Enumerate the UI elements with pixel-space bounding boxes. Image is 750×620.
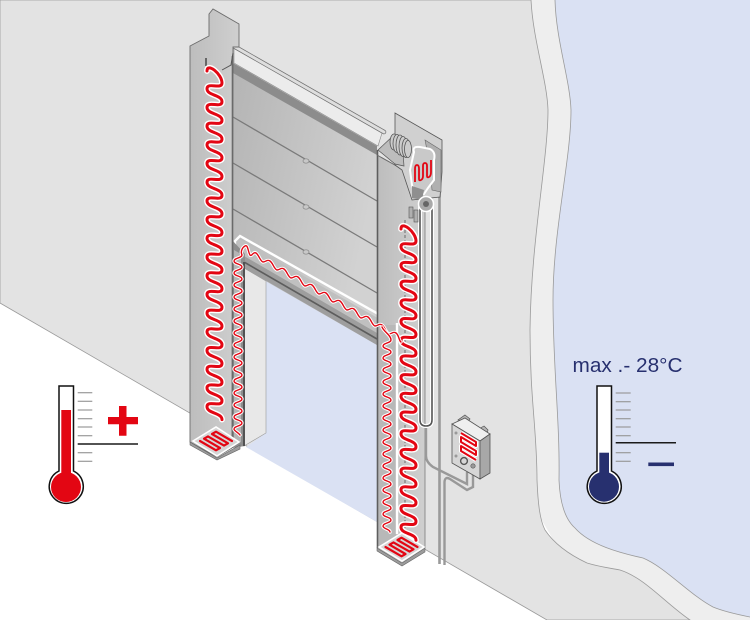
scale ticks	[616, 393, 631, 461]
cold thermometer	[587, 386, 676, 503]
door opening	[246, 280, 377, 522]
motor with heater	[410, 147, 434, 194]
left jamb	[190, 9, 266, 457]
guide tubes and cables	[420, 192, 473, 565]
drive mechanism	[378, 113, 442, 222]
panel ribs	[233, 117, 377, 293]
right floor pad	[377, 533, 425, 566]
control box	[452, 415, 490, 479]
weights	[409, 207, 413, 218]
spring coil	[390, 134, 412, 158]
right jamb	[377, 150, 425, 563]
scale ticks	[78, 393, 92, 461]
heating cable: right jamb	[401, 226, 416, 540]
minus sign	[648, 462, 674, 466]
left floor pad	[190, 427, 240, 460]
box heating coil	[461, 433, 476, 460]
temperature label: max .- 28°C	[572, 355, 682, 377]
white gap above door	[234, 48, 382, 146]
heating cable: left jamb	[207, 68, 222, 420]
top shaft	[230, 44, 384, 132]
motor heating coil	[415, 160, 431, 182]
warm thermometer	[49, 386, 138, 503]
curved band between wall and outside	[520, 0, 750, 620]
cold outside area	[550, 0, 750, 620]
plus sign	[108, 406, 138, 436]
heating cable: lintel and thin jamb runs	[234, 246, 401, 532]
header dark strip	[233, 63, 377, 155]
hinges	[303, 159, 309, 254]
wheel	[418, 196, 434, 212]
door panel	[230, 44, 384, 345]
lintel frame	[235, 236, 396, 345]
